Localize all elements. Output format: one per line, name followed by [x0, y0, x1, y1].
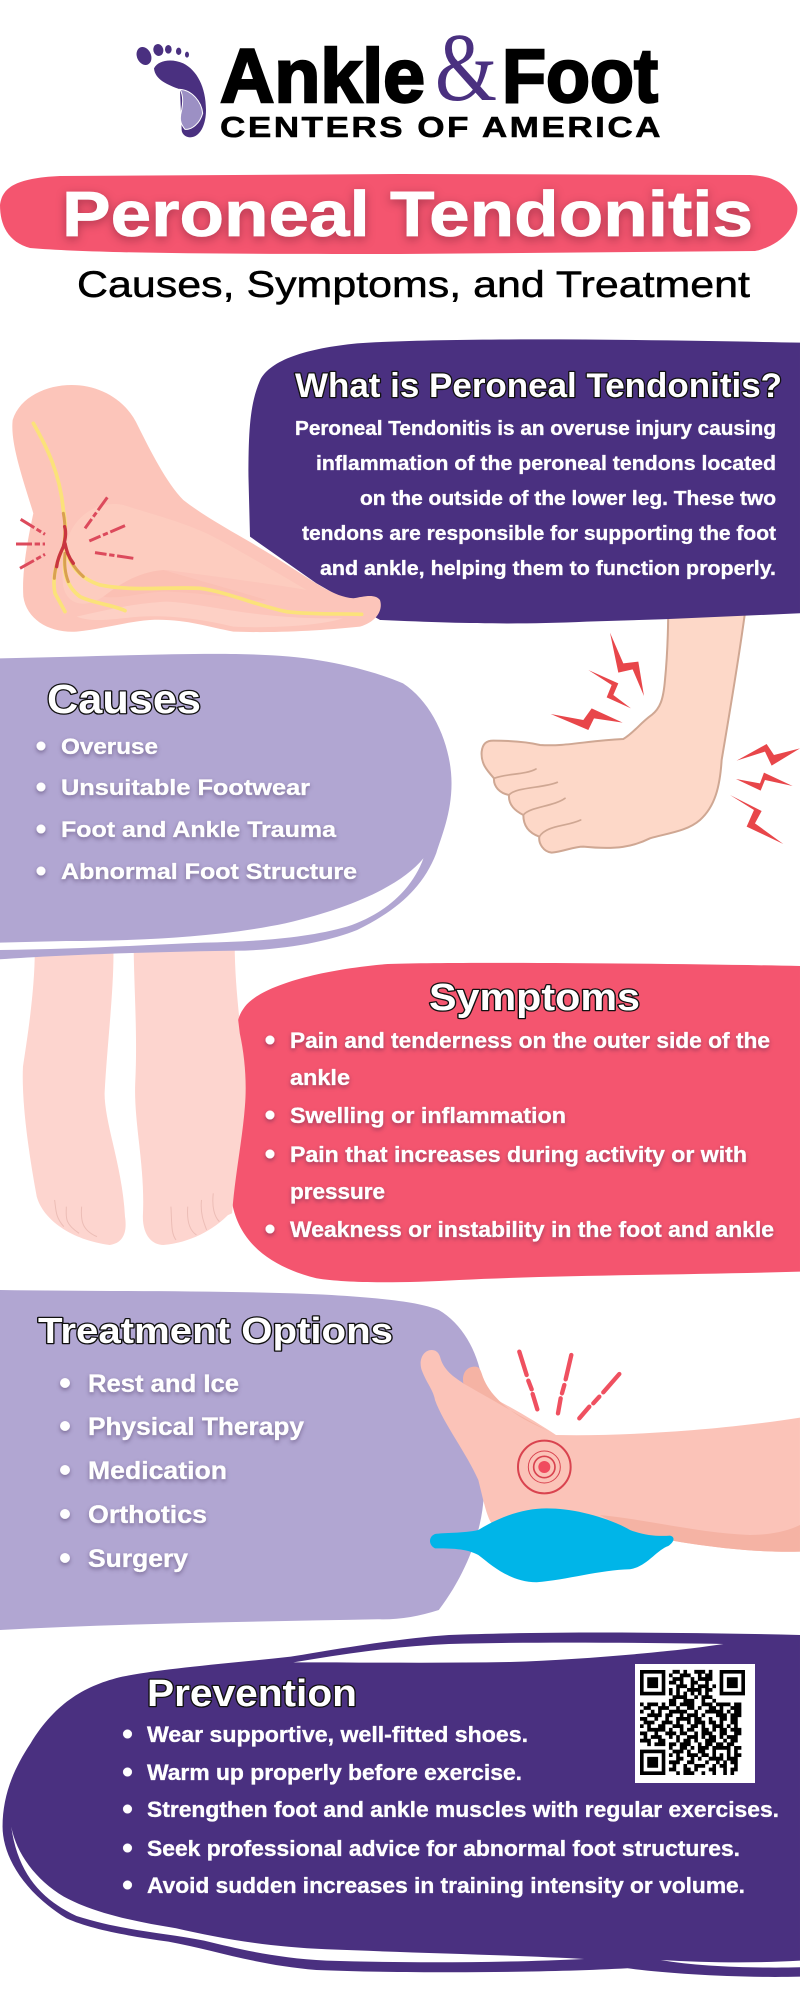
- icon: ice pack: [430, 1508, 674, 1582]
- logo: [134, 14, 663, 144]
- logo ampersand: &: [435, 14, 497, 122]
- heading: treatment options: Treatment Options: [38, 1310, 393, 1351]
- heading: symptoms: Symptoms: [429, 977, 640, 1019]
- subtitle: Causes, Symptoms, and Treatment: [77, 264, 751, 305]
- list: causes: Unsuitable Footwear: [61, 775, 311, 800]
- panel: treatment options: [0, 1290, 484, 1630]
- text block: definition: tendons are responsible for supporting the foot: [302, 523, 776, 545]
- list: symptoms: Swelling or inflammation: [290, 1103, 566, 1128]
- text block: definition: on the outside of the lower leg. These two: [360, 488, 776, 510]
- icon: pain dashes: [519, 1352, 619, 1418]
- list: prevention: Wear supportive, well-fitted shoes.: [147, 1722, 528, 1747]
- text block: definition: inflammation of the peroneal tendons located: [316, 453, 776, 475]
- list: symptoms: ankle: [290, 1065, 350, 1090]
- icon: pain bolts: [551, 633, 800, 844]
- illustration: right foot overlap: [224, 970, 246, 1217]
- list: causes: Foot and Ankle Trauma: [61, 817, 337, 842]
- list: symptoms: Pain and tenderness on the outer side of the: [290, 1028, 770, 1053]
- list: causes: Overuse: [61, 734, 158, 759]
- panel: symptoms: [232, 963, 800, 1282]
- list: symptoms: Weakness or instability in the foot and ankle: [290, 1217, 774, 1242]
- list: treatment options: Rest and Ice: [88, 1370, 239, 1398]
- heading: what is: What is Peroneal Tendonitis?: [295, 367, 782, 405]
- list: prevention: Warm up properly before exercise.: [147, 1760, 522, 1785]
- heading: causes: Causes: [47, 676, 201, 722]
- list: symptoms: [266, 1028, 774, 1242]
- text block: definition: Peroneal Tendonitis is an overuse injury causing: [295, 418, 776, 440]
- list: treatment options: [60, 1370, 304, 1573]
- list: causes: [37, 734, 357, 884]
- list: prevention: Seek professional advice for abnormal foot structures.: [147, 1836, 740, 1861]
- logo wordmark: Ankle: Ankle: [220, 34, 425, 119]
- list: treatment options: Surgery: [88, 1545, 188, 1573]
- panel: what is peroneal tendonitis: [248, 339, 800, 623]
- QR code: [635, 1664, 755, 1783]
- list: prevention: Strengthen foot and ankle muscles with regular exercises.: [147, 1797, 779, 1822]
- logo tagline: CENTERS OF AMERICA: [220, 112, 663, 144]
- tendons: [33, 423, 362, 614]
- title: Peroneal Tendonitis: [62, 178, 753, 250]
- list: treatment options: Physical Therapy: [88, 1413, 304, 1441]
- illustration: flexed foot with pain bolts: [482, 600, 800, 853]
- text block: definition: and ankle, helping them to function properly.: [320, 558, 776, 580]
- icon: pain marks: [16, 497, 133, 568]
- panel: causes: [0, 654, 452, 959]
- list: causes: Abnormal Foot Structure: [61, 859, 357, 884]
- illustration: ankle with ice pack: [421, 1350, 800, 1582]
- icon: pain target: [518, 1441, 571, 1493]
- heading: prevention: Prevention: [147, 1673, 357, 1715]
- list: symptoms: Pain that increases during activity or with: [290, 1142, 747, 1167]
- list: prevention: Avoid sudden increases in training intensity or volume.: [147, 1873, 745, 1898]
- title banner: [0, 174, 797, 254]
- list: treatment options: Orthotics: [88, 1501, 207, 1529]
- list: treatment options: Medication: [88, 1457, 227, 1485]
- logo wordmark: Foot: Foot: [502, 34, 658, 119]
- text block: definition: [295, 418, 776, 580]
- list: symptoms: pressure: [290, 1179, 385, 1204]
- icon: foot logo: [134, 43, 206, 137]
- illustration: foot with inflamed tendons: [12, 385, 381, 632]
- list: prevention: [123, 1722, 779, 1898]
- illustration: two feet: [23, 943, 245, 1245]
- panel: prevention: [3, 1632, 800, 1977]
